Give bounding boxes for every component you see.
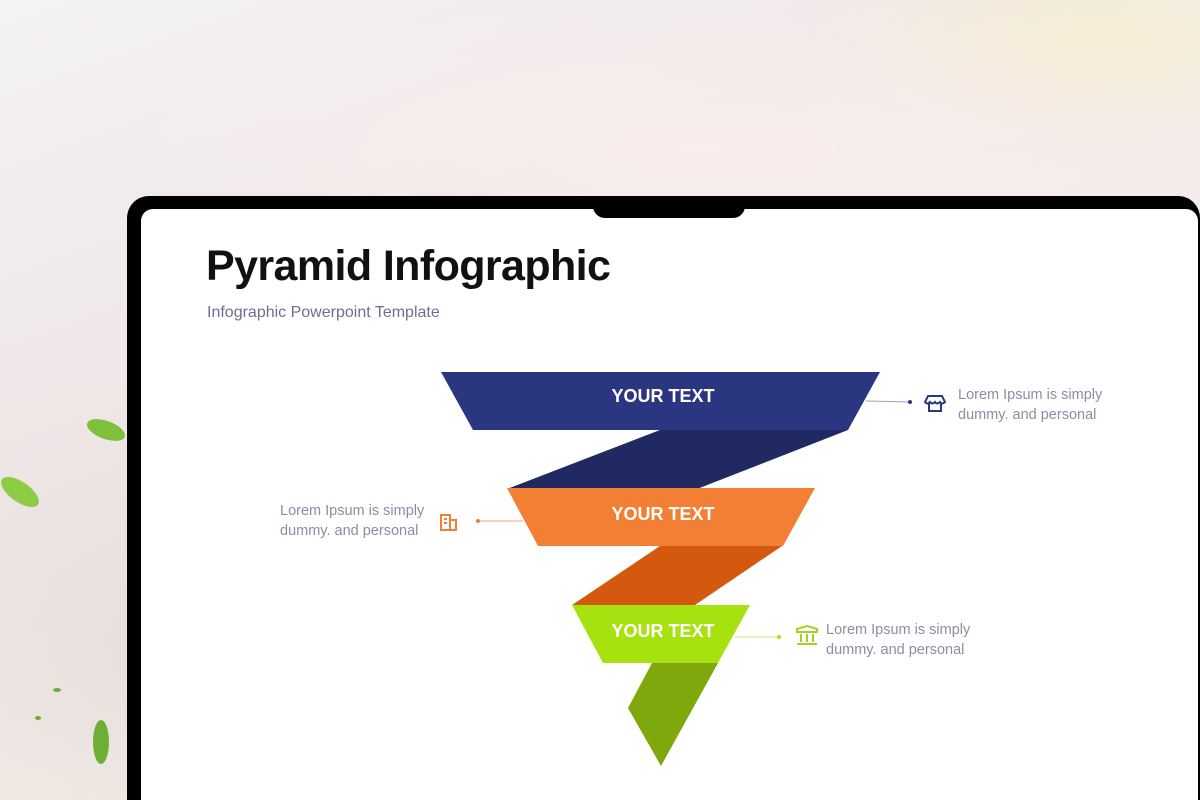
text block 1: dummy. and personal bbox=[958, 407, 1096, 423]
icon: building orange bbox=[441, 515, 456, 530]
connector line 2 bbox=[476, 519, 523, 523]
icon: bank green bbox=[797, 626, 817, 644]
screen bbox=[141, 209, 1198, 800]
text block 1 bbox=[958, 387, 1102, 423]
text block 3: dummy. and personal bbox=[826, 642, 964, 658]
connector orange bbox=[572, 546, 782, 605]
connector line 3 bbox=[735, 635, 781, 639]
band 3: YOUR TEXT bbox=[611, 621, 715, 641]
leaves decoration bbox=[1, 419, 125, 764]
text block 3 bbox=[826, 622, 970, 658]
band 1 bbox=[441, 372, 880, 430]
text block 3: Lorem Ipsum is simply bbox=[826, 622, 970, 638]
device frame bbox=[127, 196, 1200, 800]
icon: store bbox=[925, 396, 945, 411]
text block 1: Lorem Ipsum is simply bbox=[958, 387, 1102, 403]
connector blue bbox=[507, 430, 848, 489]
band 2: YOUR TEXT bbox=[611, 504, 715, 524]
text block 2: Lorem Ipsum is simply bbox=[280, 503, 424, 519]
text block 2 bbox=[280, 503, 424, 539]
band 1: YOUR TEXT bbox=[611, 386, 715, 406]
camera notch bbox=[593, 205, 745, 218]
subtitle: Infographic Powerpoint Template bbox=[207, 304, 440, 321]
connector line 1 bbox=[866, 400, 912, 404]
title: Pyramid Infographic bbox=[206, 242, 610, 290]
green tail bbox=[628, 663, 718, 766]
band 2 bbox=[507, 488, 815, 546]
text block 2: dummy. and personal bbox=[280, 523, 418, 539]
band 3 bbox=[572, 605, 750, 663]
